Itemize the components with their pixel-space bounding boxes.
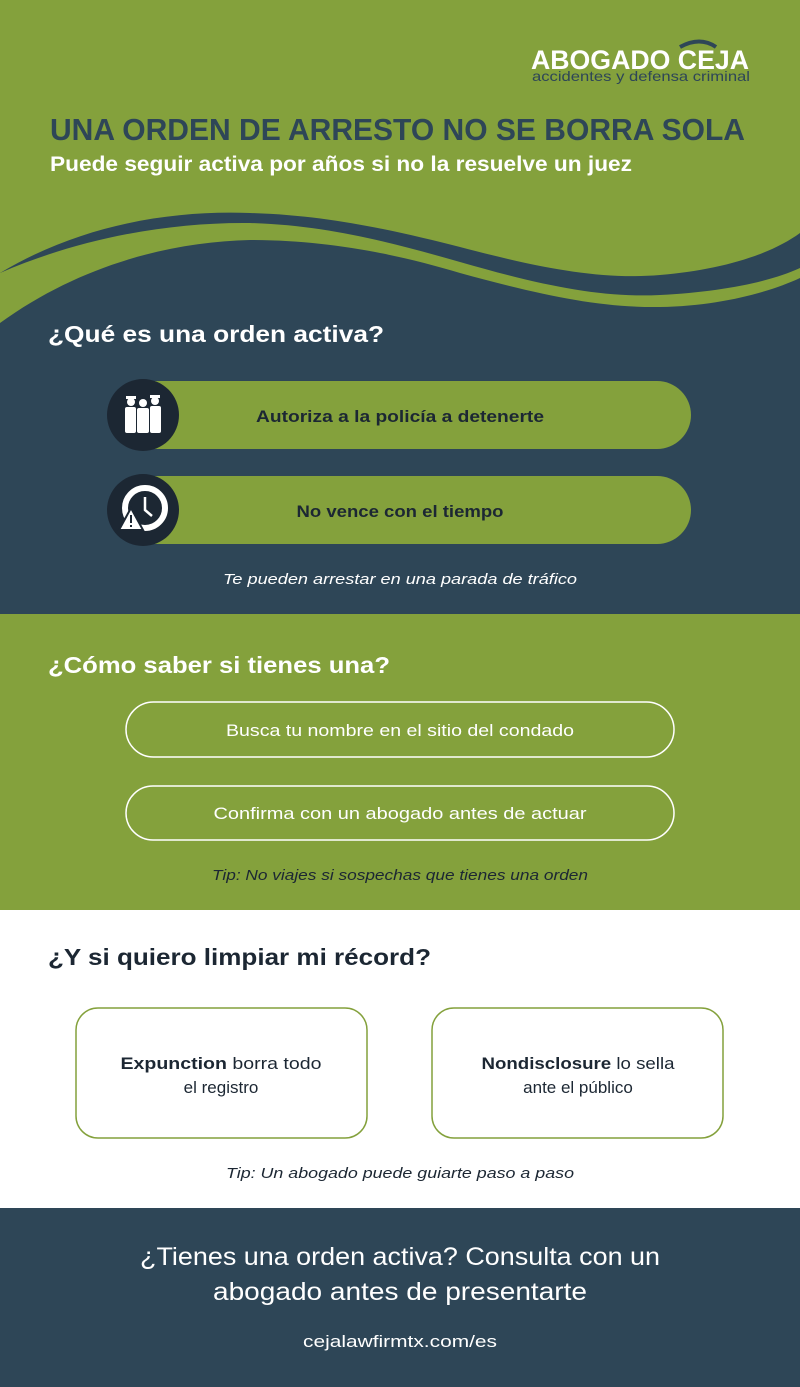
- box: expunction: Expunction borra todo: [120, 1054, 322, 1073]
- footer CTA: abogado antes de presentarte: [213, 1278, 587, 1306]
- box: expunction: [76, 1008, 367, 1138]
- pill 2: Confirma con un abogado antes de actuar: [214, 804, 587, 823]
- note: trafico: Te pueden arrestar en una parada de tráfico: [223, 571, 577, 588]
- box: nondisclosure: [432, 1008, 723, 1138]
- pill 1: Busca tu nombre en el sitio del condado: [226, 721, 574, 740]
- panel: limpiar record: [0, 910, 800, 1208]
- item: no vence: No vence con el tiempo: [296, 502, 504, 521]
- heading: ¿Y si quiero limpiar mi récord?: [48, 944, 431, 970]
- item: autoriza: [107, 379, 691, 451]
- title: UNA ORDEN DE ARRESTO NO SE BORRA SOLA: [50, 112, 745, 147]
- tip: Tip: Un abogado puede guiarte paso a paso: [226, 1165, 574, 1182]
- pill 2: [126, 786, 674, 840]
- item: no vence: [107, 474, 691, 546]
- panel: como saber: [0, 614, 800, 910]
- footer CTA: ¿Tienes una orden activa? Consulta con un: [140, 1243, 660, 1271]
- item: autoriza: Autoriza a la policía a detenerte: [256, 407, 544, 426]
- box: nondisclosure: ante el público: [523, 1078, 633, 1097]
- subtitle: Puede seguir activa por años si no la resuelve un juez: [50, 153, 632, 176]
- pill 1: [126, 702, 674, 757]
- box: nondisclosure: Nondisclosure lo sella: [482, 1054, 675, 1073]
- logo: ABOGADO CEJA: [531, 45, 749, 75]
- tip: Tip: No viajes si sospechas que tienes una orden: [212, 867, 588, 884]
- heading: ¿Cómo saber si tienes una?: [48, 652, 390, 678]
- icon: police people: [125, 395, 161, 433]
- footer CTA: [0, 1208, 800, 1387]
- logo: accidentes y defensa criminal: [532, 68, 750, 84]
- icon: clock warning: [119, 488, 165, 530]
- box: expunction: el registro: [184, 1078, 258, 1097]
- wave band: [0, 213, 800, 800]
- heading: que es una orden activa: ¿Qué es una orden activa?: [48, 321, 384, 347]
- header background: [0, 0, 800, 340]
- url: cejalawfirmtx.com/es: [303, 1332, 497, 1351]
